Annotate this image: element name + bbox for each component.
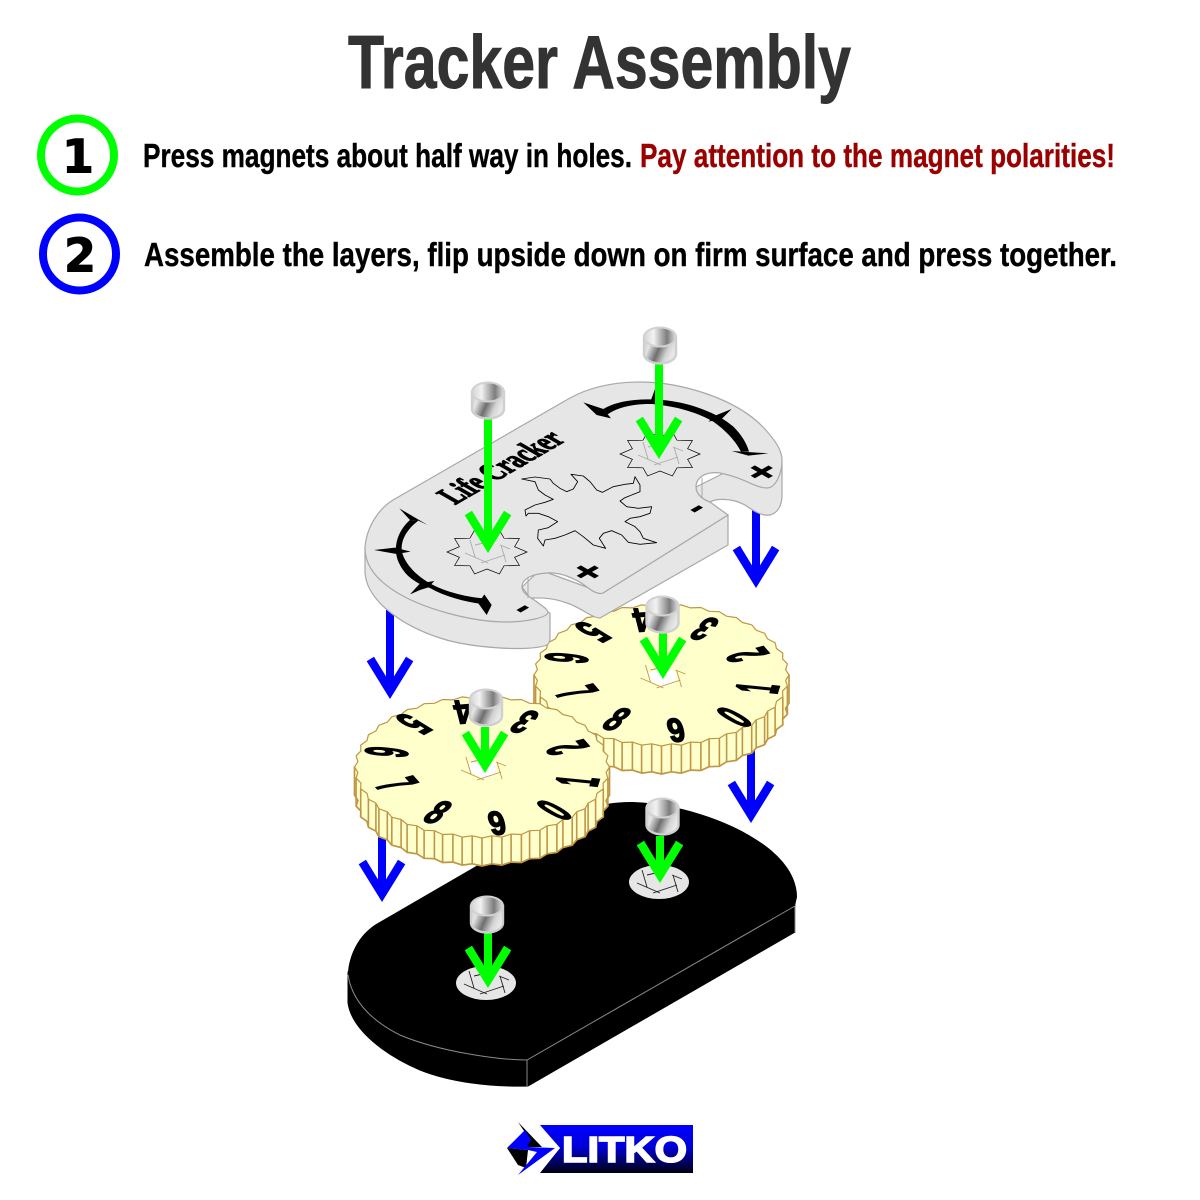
blue arrow to base left (359, 820, 405, 902)
step 1 badge (41, 118, 114, 192)
front dial: 5 (384, 707, 443, 740)
front dial: 8 (414, 795, 460, 831)
polarity marks: - (497, 594, 543, 620)
front dial: 0 (525, 794, 584, 827)
green arrow top plate left (465, 419, 511, 553)
back dial: 7 (543, 680, 611, 704)
front dial: 6 (351, 744, 420, 760)
step 1 instruction: Press magnets about half way in holes. (143, 137, 632, 174)
left hole star (447, 530, 527, 574)
left curved arrow (374, 508, 492, 615)
blue arrow to front dial (367, 610, 413, 699)
magnet top plate left (472, 382, 504, 418)
back dial: 3 (682, 610, 728, 646)
step 2 badge: 2 (64, 228, 96, 282)
polarity marks (497, 455, 791, 620)
back dial: 5 (563, 615, 622, 648)
right hole star (620, 432, 700, 476)
step 1 badge: 1 (62, 130, 94, 184)
back dial: 8 (593, 702, 639, 738)
logo: LITKO (562, 1129, 687, 1170)
logo (507, 1122, 693, 1175)
notch edges (528, 478, 702, 598)
blue arrow to base right (728, 750, 774, 823)
front dial: 9 (484, 804, 510, 842)
back dial: 6 (531, 650, 600, 666)
top plate (365, 382, 791, 649)
green arrow back dial (640, 633, 686, 679)
magnet base left (471, 896, 503, 932)
front dial: 7 (363, 772, 431, 796)
back dial: 4 (629, 601, 655, 639)
base plate hole left (456, 966, 516, 1000)
step 2 badge (43, 218, 116, 290)
back dial: 1 (724, 680, 793, 696)
back dial: 0 (705, 701, 764, 734)
front dial: 1 (544, 773, 613, 789)
title: Tracker Assembly (348, 20, 851, 104)
green arrow front dial (462, 727, 508, 773)
front dial: 3 (502, 703, 548, 739)
plate name: Life Cracker (428, 425, 574, 509)
base plate hole right (629, 865, 689, 899)
blue arrow to back dial (733, 505, 779, 588)
polarity marks: - (671, 494, 717, 520)
back dial: 9 (663, 711, 689, 749)
front dial (351, 693, 613, 866)
green arrow top plate right (636, 364, 682, 459)
polarity marks: + (733, 455, 791, 489)
right curved arrow (583, 389, 768, 456)
sun emblem (522, 474, 657, 548)
back dial (531, 601, 793, 774)
green arrow base right (637, 836, 683, 883)
magnet front dial (470, 690, 502, 726)
polarity marks: + (559, 555, 617, 589)
plate top face (365, 382, 782, 622)
step 1 instruction (143, 137, 1115, 174)
front dial: 2 (533, 736, 601, 760)
magnet back dial (646, 596, 678, 632)
back dial: 2 (713, 643, 781, 667)
magnet top plate right (644, 328, 676, 364)
black base plate (348, 802, 797, 1086)
plate sides (365, 460, 782, 649)
green arrow base left (465, 933, 511, 988)
front dial: 4 (450, 693, 476, 731)
magnet base right (646, 798, 678, 834)
